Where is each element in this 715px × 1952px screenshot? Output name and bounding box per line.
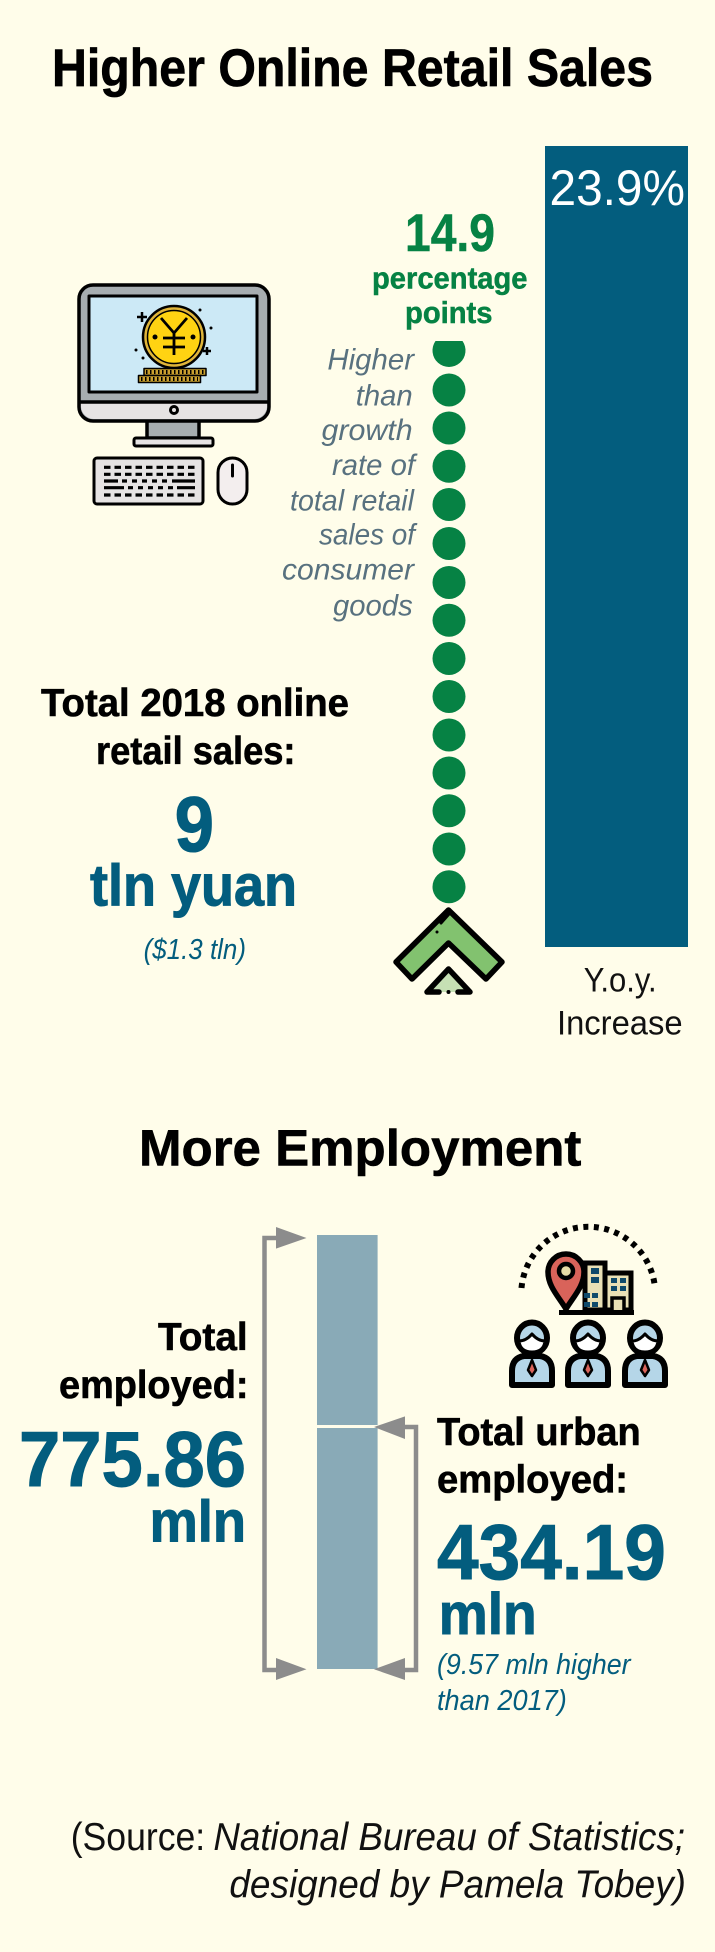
- figure: 9 tln yuan: 9: [175, 780, 214, 868]
- icon: upward chevron arrow: [396, 910, 502, 994]
- text: total urban employed: [437, 1411, 641, 1502]
- monitor stand: [147, 420, 199, 438]
- figure: 9 tln yuan: [90, 780, 297, 918]
- note: higher than growth rate of total retail sales of consumer goods: goods: [333, 590, 413, 622]
- bracket arrow: total employed: [264, 1227, 306, 1680]
- location pin: [548, 1254, 584, 1309]
- figure: 434.19 mln: [437, 1508, 666, 1647]
- note: 9.57 mln higher than 2017: (9.57 mln higher: [437, 1649, 632, 1681]
- bar label: Y.o.y. Increase: Y.o.y.: [584, 962, 657, 1000]
- text: total urban employed: employed:: [437, 1458, 628, 1502]
- text: total urban employed: Total urban: [437, 1411, 641, 1454]
- note: higher than growth rate of total retail sales of consumer goods: Higher: [327, 344, 415, 376]
- worker 2: [568, 1322, 608, 1385]
- coin stack: [144, 368, 206, 376]
- note: higher than growth rate of total retail sales of consumer goods: total retail: [290, 484, 415, 518]
- note: higher than growth rate of total retail sales of consumer goods: growth: [322, 414, 413, 447]
- callout: 14.9 percentage points: 14.9: [405, 204, 495, 263]
- bar value: 23.9%: 23.9%: [550, 160, 685, 216]
- bar: year-on-year increase: [545, 146, 688, 947]
- worker 3: [625, 1322, 665, 1385]
- figure: 434.19 mln: 434.19: [437, 1508, 666, 1596]
- coin: [143, 306, 205, 368]
- figure: 775.86 mln: mln: [150, 1490, 246, 1554]
- dotted arc: [522, 1227, 655, 1288]
- bar label: Y.o.y. Increase: [557, 962, 683, 1042]
- figure: 775.86 mln: [19, 1415, 246, 1554]
- text: total employed: [59, 1316, 248, 1407]
- note: higher than growth rate of total retail sales of consumer goods: consumer: [282, 554, 415, 586]
- panel: online retail sales: [41, 39, 688, 1042]
- text: total 2018 online retail sales: [41, 682, 349, 773]
- figure: 434.19 mln: mln: [439, 1582, 537, 1647]
- bar: total employed with urban divider: [317, 1235, 378, 1669]
- bracket arrow: total urban employed: [374, 1416, 416, 1680]
- dotted line of green circles: [432, 341, 466, 903]
- text: total 2018 online retail sales: Total 2018 online: [41, 682, 349, 725]
- icon: desktop computer with yuan coin: [79, 285, 269, 504]
- text: total 2018 online retail sales: retail sales:: [96, 730, 296, 773]
- figure: 775.86 mln: 775.86: [19, 1415, 246, 1503]
- callout: 14.9 percentage points: points: [405, 295, 492, 330]
- bar label: Y.o.y. Increase: Increase: [557, 1004, 683, 1042]
- note: 9.57 mln higher than 2017: than 2017): [437, 1685, 567, 1717]
- worker 1: [512, 1322, 552, 1385]
- callout: 14.9 percentage points: [372, 204, 528, 330]
- text: total employed: Total: [158, 1316, 248, 1359]
- source credit: designed by Pamela Tobey): [229, 1864, 686, 1906]
- panel: more employment: [19, 1120, 666, 1717]
- note: higher than growth rate of total retail sales of consumer goods: rate of: [332, 449, 418, 482]
- note: higher than growth rate of total retail sales of consumer goods: [282, 344, 418, 622]
- icon: urban workers with location pin and buildings: [512, 1227, 665, 1385]
- source credit: National Bureau of Statistics;: [213, 1816, 685, 1859]
- source credit: [71, 1816, 686, 1906]
- title: Higher Online Retail Sales: Higher Online Retail Sales: [52, 39, 653, 98]
- callout: 14.9 percentage points: percentage: [372, 260, 528, 296]
- heading: More Employment: More Employment: [139, 1120, 581, 1176]
- source credit: (Source:: [71, 1816, 205, 1859]
- text: total employed: employed:: [59, 1364, 248, 1407]
- note: higher than growth rate of total retail sales of consumer goods: than: [356, 380, 413, 412]
- monitor body: [79, 285, 269, 421]
- note: higher than growth rate of total retail sales of consumer goods: sales of: [319, 518, 417, 552]
- buildings: [585, 1263, 605, 1310]
- note: 9.57 mln higher than 2017: [437, 1649, 632, 1717]
- keyboard: [94, 458, 203, 504]
- screen: [89, 296, 257, 392]
- note: $1.3 tln: ($1.3 tln): [144, 934, 246, 966]
- figure: 9 tln yuan: tln yuan: [90, 854, 297, 918]
- mouse: [218, 458, 247, 504]
